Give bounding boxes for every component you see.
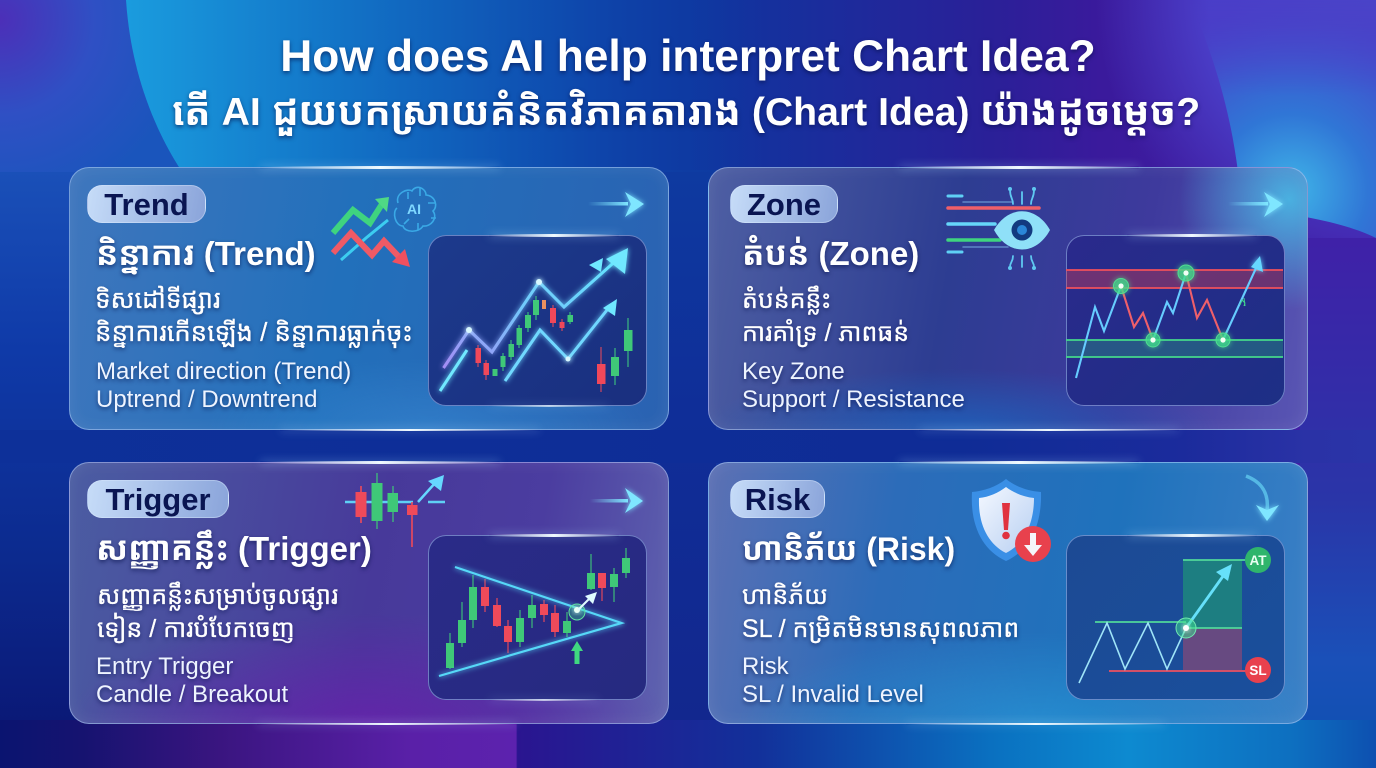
Trend English description: Market direction (Trend) [96, 358, 351, 385]
Trend label pill [87, 185, 206, 223]
panel: Zone [708, 167, 1308, 430]
Trend Khmer description: និន្នាការកើនឡើង / និន្នាការធ្លាក់ចុះ [95, 319, 413, 347]
arrow: Zone [1231, 192, 1284, 218]
Trigger English description [95, 653, 288, 708]
Risk English description: Risk [742, 653, 789, 680]
icon: eye and levels [946, 187, 1050, 270]
Trigger label pill [87, 480, 229, 518]
Zone Khmer description: ការគាំទ្រ / ភាពធន់ [742, 319, 909, 347]
Zone label pill: Zone [747, 187, 821, 222]
Trigger Khmer description: សញ្ញាគន្លឹះសម្រាប់ចូលផ្សារ [97, 582, 338, 610]
panel: Trigger [69, 462, 669, 724]
Risk Khmer description: SL / កម្រិតមិនមានសុពលភាព [742, 615, 1019, 643]
chart panel: zone [1066, 235, 1285, 406]
subtitle in Khmer: តើ AI ជួយបកស្រាយគំនិតវិភាគតារាង (Chart Idea) យ៉ាងដូចម្តេច? [172, 91, 1200, 134]
Zone label pill [730, 185, 838, 223]
Trend heading: និន្នាការ (Trend) [96, 235, 316, 272]
Trigger Khmer description: ទៀន / ការបំបែកចេញ [97, 615, 295, 643]
Risk heading: ហានិភ័យ (Risk) [742, 531, 955, 567]
SL badge: SL [1249, 663, 1267, 678]
Risk Khmer description: ហានិភ័យ [742, 582, 828, 610]
chart panel: trigger [428, 535, 647, 700]
title: How does AI help interpret Chart Idea? [280, 32, 1096, 81]
icon: trend arrows and AI brain [330, 186, 436, 267]
icon: trend arrows and AI brain: AI [407, 201, 421, 217]
Trend Khmer description: ទិសដៅទីផ្សារ [95, 286, 220, 314]
Trend Khmer description [95, 286, 413, 352]
panel: Risk [708, 462, 1308, 724]
Trend label pill: Trend [104, 187, 189, 222]
chart panel: trend [428, 235, 647, 406]
arrow: Trigger [592, 486, 645, 514]
chart: support and resistance zones [1066, 254, 1283, 378]
arrow: Trend [590, 190, 646, 218]
AT badge: AT [1250, 553, 1267, 568]
Zone English description: Support / Resistance [742, 386, 965, 413]
Zone heading: តំបន់ (Zone) [742, 235, 919, 272]
Trigger heading: សញ្ញាគន្លឹះ (Trigger) [96, 530, 372, 567]
Trigger English description: Candle / Breakout [96, 681, 288, 708]
icon: candles and breakout arrow [345, 473, 445, 547]
arrow: Risk curved [1246, 474, 1280, 522]
AT badge [1245, 547, 1271, 573]
Zone English description: Key Zone [742, 358, 845, 385]
Risk Khmer description [741, 582, 1020, 648]
chart: trend lines and candles [436, 246, 632, 394]
chart panel: risk [1066, 535, 1285, 700]
Trigger Khmer description [96, 581, 339, 647]
Risk label pill: Risk [745, 482, 810, 517]
Risk English description: SL / Invalid Level [742, 681, 924, 708]
icon: shield warning [972, 479, 1051, 562]
Trend English description: Uptrend / Downtrend [96, 386, 317, 413]
SL badge [1245, 657, 1271, 683]
panel: Trend [69, 167, 669, 430]
Trend English description [96, 358, 352, 415]
Zone Khmer description: តំបន់គន្លឹះ [742, 286, 831, 314]
Risk label pill [730, 480, 825, 518]
Zone English description [742, 358, 966, 414]
Trigger English description: Entry Trigger [96, 653, 233, 680]
Trigger label pill: Trigger [105, 482, 211, 517]
Zone Khmer description [742, 285, 909, 350]
chart: risk reward box [1078, 547, 1271, 684]
chart: triangle breakout [436, 548, 630, 680]
Risk English description [742, 653, 925, 708]
